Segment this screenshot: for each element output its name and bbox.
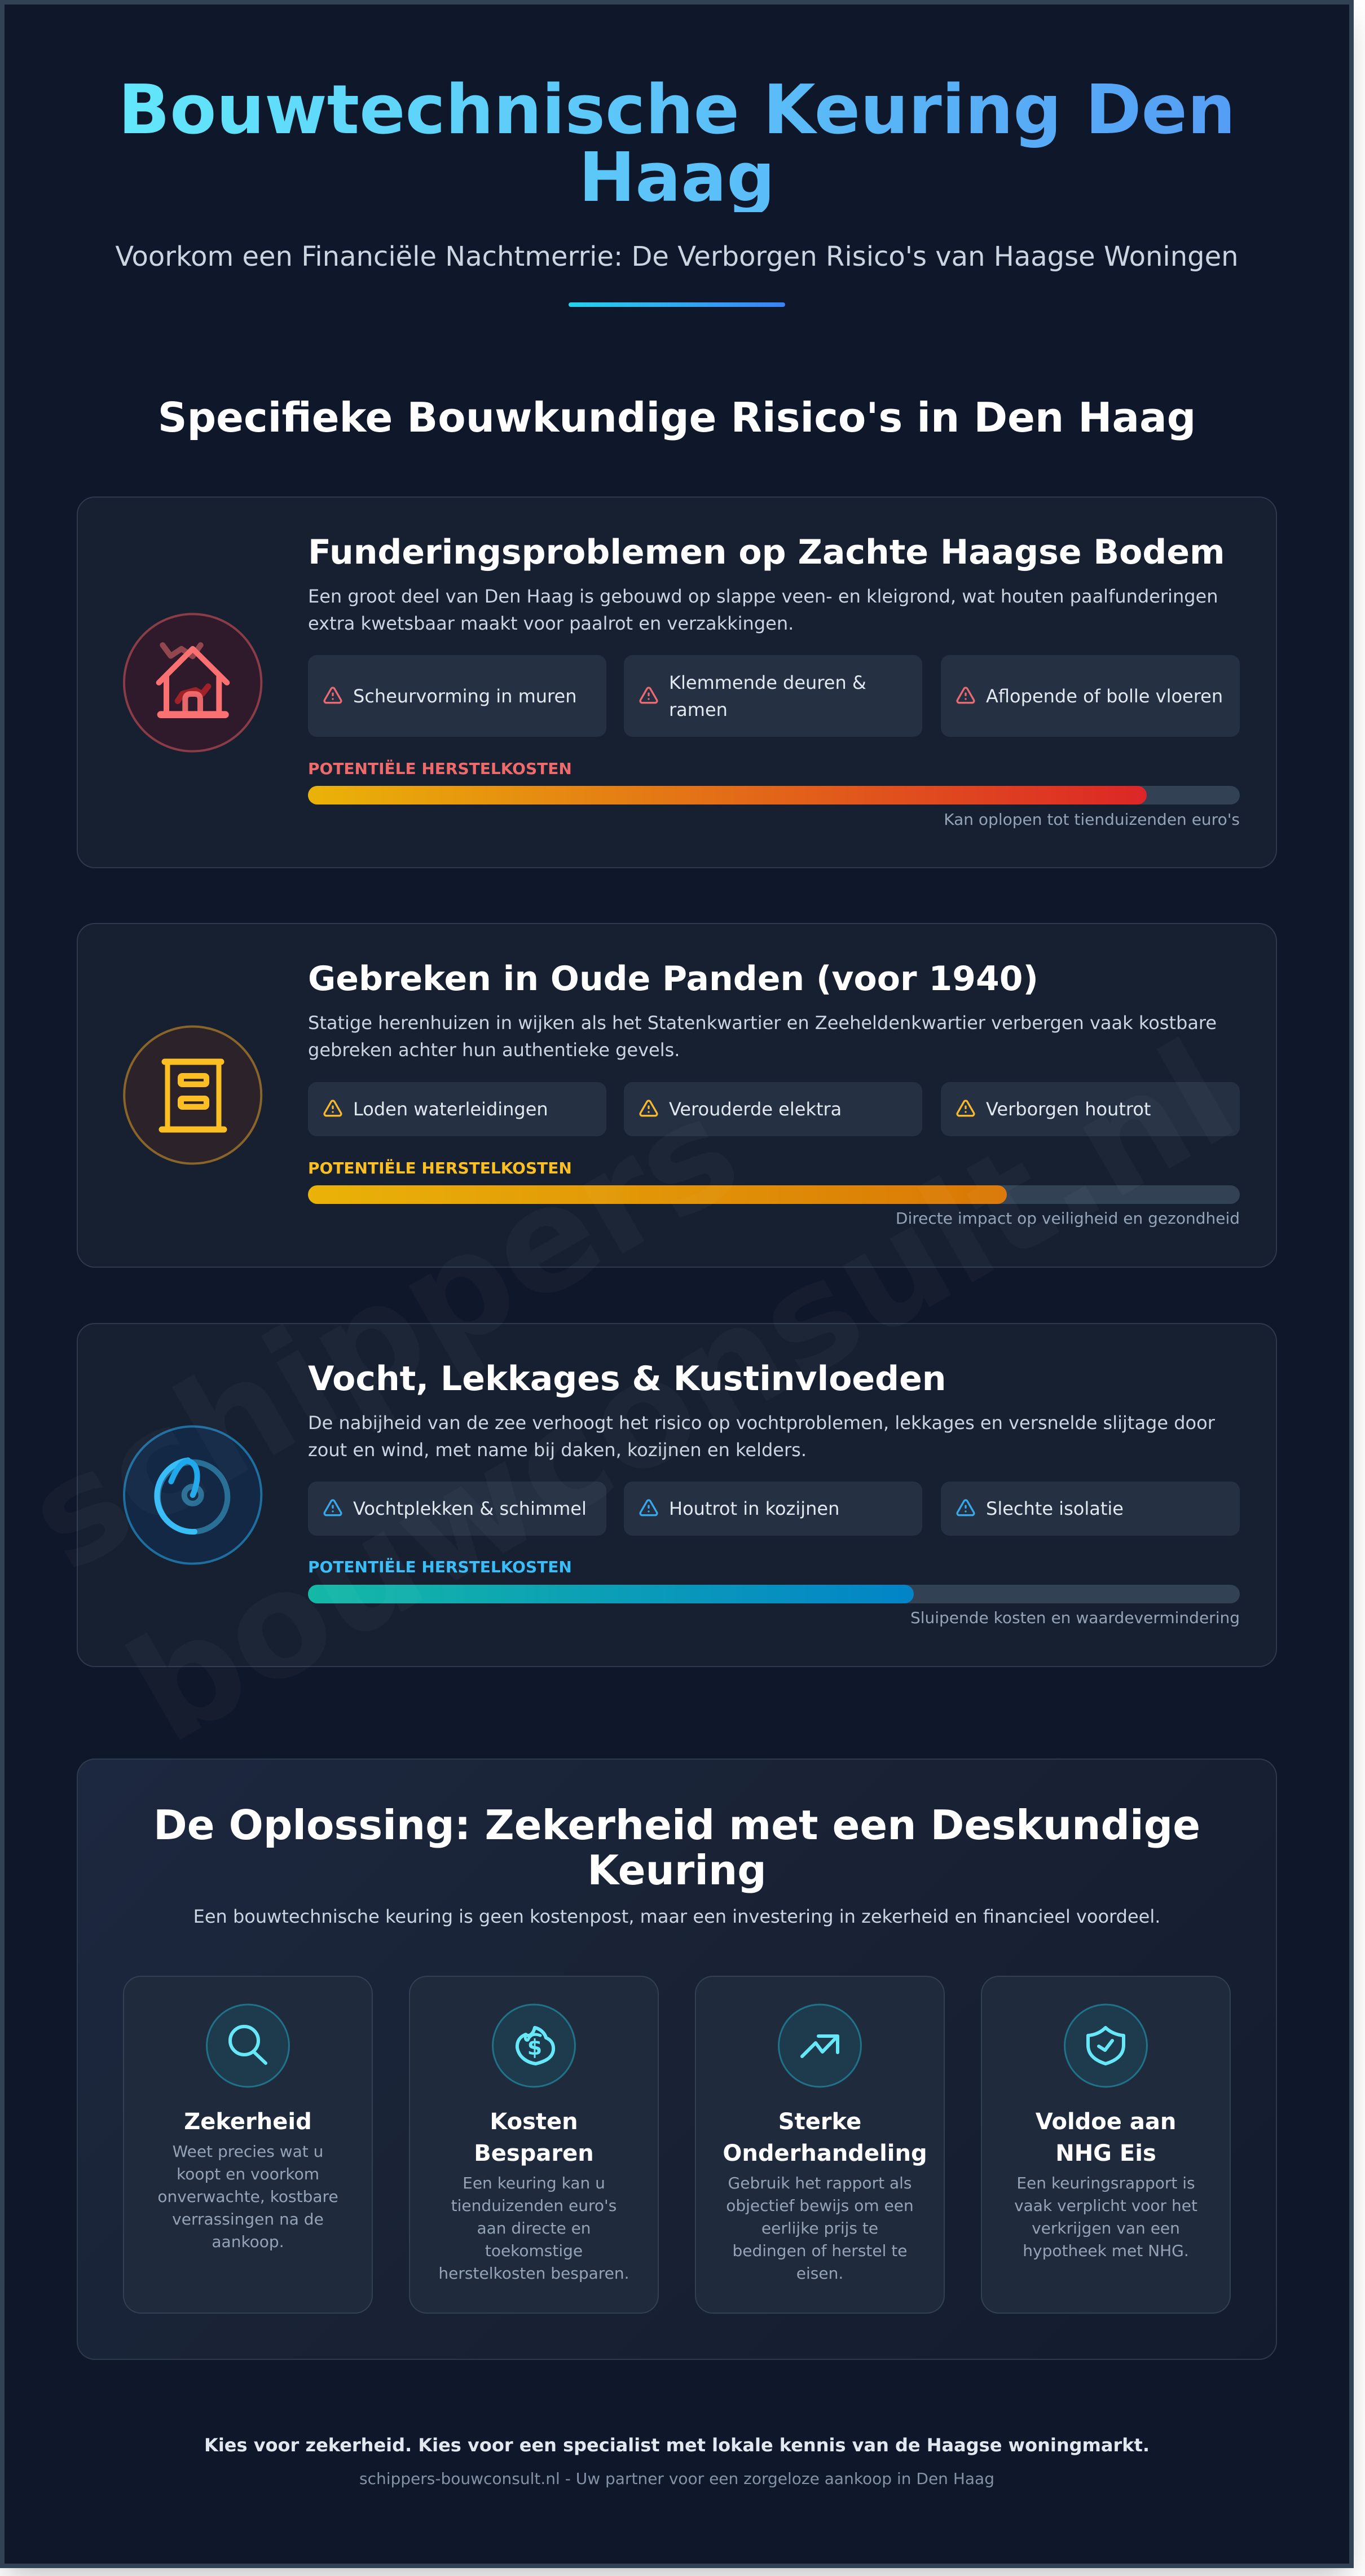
benefit: sterke onderhandeling [695,1976,945,2314]
icon: cracked house [123,613,263,753]
icon: shield check [1064,2004,1148,2087]
panel: funderingsproblemen [77,496,1277,868]
solution heading: De Oplossing: Zekerheid met een Deskundige [153,1801,1200,1849]
chip: scheurvorming [308,655,606,737]
icon: money blob [492,2004,576,2087]
heading: Vocht, Lekkages & Kustinvloeden [308,1359,946,1399]
heading [1036,2109,1176,2166]
description [308,1412,1215,1461]
description: verkrijgen van een [1032,2219,1180,2237]
chip: aflopende vloeren: Aflopende of bolle vloeren [986,685,1223,706]
icon: trend arrow [778,2004,862,2087]
icon: magnifier [206,2004,290,2087]
heading: Besparen [474,2140,594,2166]
heading [474,2109,594,2166]
description: extra kwetsbaar maakt voor paalrot en verzakkingen. [308,613,794,634]
heading: Funderingsproblemen op Zachte Haagse Bodem [308,533,1225,572]
description: De nabijheid van de zee verhoogt het risico op vochtproblemen, lekkages en versnelde slijtage door [308,1412,1215,1434]
description: aan directe en [477,2219,591,2237]
benefit: NHG eis [981,1976,1231,2314]
cost bar 65% [308,1585,1240,1603]
description: gebreken achter hun authentieke gevels. [308,1039,680,1061]
cost note: Directe impact op veiligheid en gezondheid [896,1209,1240,1228]
description: Statige herenhuizen in wijken als het Statenkwartier en Zeeheldenkwartier verbergen vaak kostbare [308,1012,1217,1034]
cost bar 75% [308,1185,1240,1204]
description [726,2174,914,2283]
heading: NHG Eis [1055,2140,1156,2166]
chip: verouderde elektra: Verouderde elektra [669,1098,842,1120]
watermark: bouwconsult.nl [103,1010,1261,1776]
description [438,2174,629,2283]
description: Weet precies wat u [173,2142,323,2161]
chip: verouderde elektra [624,1082,922,1136]
watermark: schippers [1,1065,765,1604]
icon: door with drawers [123,1026,263,1164]
description [308,1012,1217,1061]
chip: houtrot in kozijnen [624,1482,922,1536]
chip: aflopende vloeren [941,655,1240,737]
chip: klemmende deuren [624,655,922,737]
panel: vocht en lekkages [77,1323,1277,1667]
cost bar 90% [308,786,1240,805]
title: Bouwtechnische Keuring Den [118,71,1235,150]
benefit: kosten besparen [409,1976,659,2314]
description [308,586,1218,634]
description: verrassingen na de [172,2210,324,2228]
heading [723,2109,927,2166]
description: objectief bewijs om een [726,2196,914,2215]
heading: Voldoe aan [1036,2109,1176,2135]
icon: money blob: $ [527,2035,542,2060]
heading: Kosten [490,2109,578,2135]
chip: slechte isolatie: Slechte isolatie [986,1498,1124,1519]
chip: scheurvorming: Scheurvorming in muren [353,685,576,706]
chip: houtrot in kozijnen: Houtrot in kozijnen [669,1498,839,1519]
heading: Sterke [778,2109,861,2135]
title: Haag [579,139,775,217]
panel: de oplossing [77,1759,1277,2360]
heading: Onderhandeling [723,2140,927,2166]
chip: loden waterleidingen: Loden waterleidingen [353,1098,548,1120]
description [157,2142,338,2251]
solution heading [153,1801,1200,1894]
solution intro: Een bouwtechnische keuring is geen kostenpost, maar een investering in zekerheid en financieel voordeel. [193,1906,1160,1927]
panel: oude panden [77,923,1277,1268]
chip: klemmende deuren: Klemmende deuren & [669,671,866,693]
subtitle: Voorkom een Financiële Nachtmerrie: De Verborgen Risico's van Haagse Woningen [115,241,1239,272]
description: Een groot deel van Den Haag is gebouwd op slappe veen- en kleigrond, wat houten paalfunderingen [308,586,1218,607]
description: Gebruik het rapport als [728,2174,912,2192]
description: hypotheek met NHG. [1023,2241,1189,2260]
title [77,77,1277,212]
description: Een keuring kan u [463,2174,605,2192]
section heading: Specifieke Bouwkundige Risico's in Den Haag [158,394,1196,441]
chip: klemmende deuren: ramen [669,698,728,720]
chip: loden waterleidingen [308,1082,606,1136]
description: zout en wind, met name bij daken, kozijnen en kelders. [308,1439,807,1461]
cost label: POTENTIËLE HERSTELKOSTEN [308,759,572,778]
description: vaak verplicht voor het [1014,2196,1197,2215]
footer call to action: Kies voor zekerheid. Kies voor een specialist met lokale kennis van de Haagse woningmarkt. [204,2434,1150,2456]
description: eerlijke prijs te [761,2219,878,2237]
cost note: Sluipende kosten en waardevermindering [910,1608,1240,1627]
description [1014,2174,1197,2260]
description: aankoop. [212,2232,284,2251]
cost note: Kan oplopen tot tienduizenden euro's [944,810,1240,829]
description: bedingen of herstel te [732,2241,907,2260]
description: tienduizenden euro's [451,2196,617,2215]
solution heading: Keuring [587,1847,767,1894]
heading: Gebreken in Oude Panden (voor 1940) [308,959,1038,999]
title divider [569,302,785,307]
description: onverwachte, kostbare [157,2187,338,2206]
chip: slechte isolatie [941,1482,1240,1536]
heading: Zekerheid [184,2109,312,2135]
footer tagline: schippers-bouwconsult.nl - Uw partner voor een zorgeloze aankoop in Den Haag [359,2469,994,2488]
description: Een keuringsrapport is [1016,2174,1195,2192]
chip: vochtplekken: Vochtplekken & schimmel [353,1498,587,1519]
icon: water ring [123,1425,263,1565]
chip: verborgen houtrot [941,1082,1240,1136]
cost label: POTENTIËLE HERSTELKOSTEN [308,1558,572,1576]
chip: vochtplekken [308,1482,606,1536]
benefit: zekerheid [123,1976,373,2314]
cost label: POTENTIËLE HERSTELKOSTEN [308,1159,572,1177]
description: eisen. [796,2264,843,2283]
chip: verborgen houtrot: Verborgen houtrot [986,1098,1151,1120]
description: herstelkosten besparen. [438,2264,629,2283]
description: toekomstige [485,2241,583,2260]
description: koopt en voorkom [177,2165,319,2183]
